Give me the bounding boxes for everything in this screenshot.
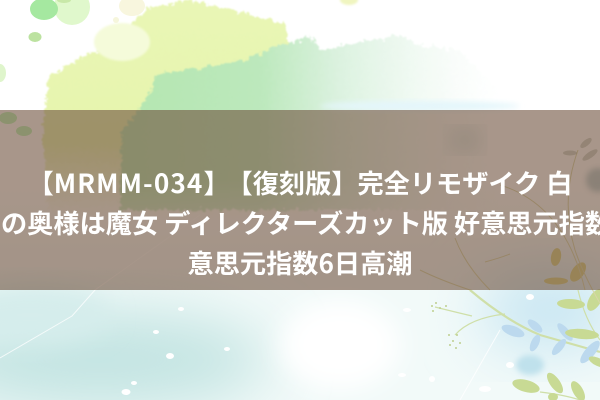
sparkle lines and dots [0,215,534,400]
faded dark leaves [451,130,600,192]
pale blue lower wash [0,180,600,400]
green leaves [511,247,600,400]
plant sprigs [431,290,600,400]
title line 3: 意思元指数6日高潮 [188,243,412,281]
circles top left [0,0,358,136]
translucent title band [0,110,600,290]
title line 2: の奥様は魔女 ディレクターズカット版 好意思元指数 [1,203,600,241]
faded sprigs behind the band [420,150,600,320]
mint watercolor splash [120,35,520,210]
title line 1: 【MRMM-034】 【復刻版】完全リモザイク 白 [28,163,572,201]
blue leaves [500,317,600,366]
lime watercolor splash [42,0,300,220]
